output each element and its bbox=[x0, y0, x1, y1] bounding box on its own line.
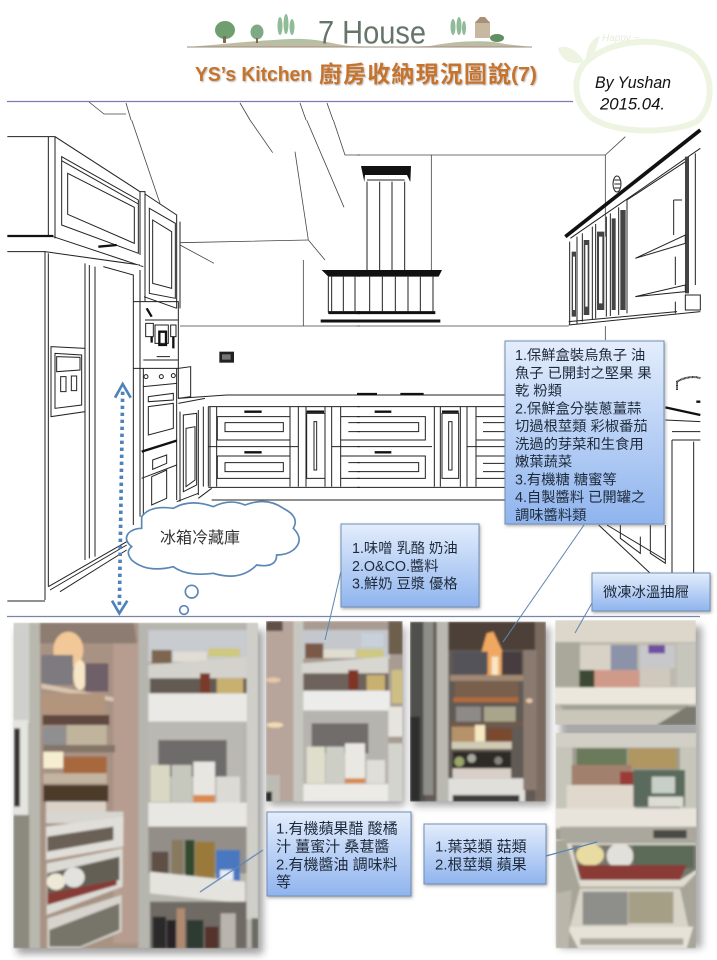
lower section rule bbox=[7, 616, 700, 618]
leader lines bbox=[200, 525, 597, 892]
tall narrow cabinet bbox=[133, 192, 180, 368]
photo: upper door bins bbox=[266, 621, 405, 806]
callout: fridge shelves: 3.有機糖 糖蜜等 bbox=[515, 470, 617, 488]
callout: fridge shelves: 4.自製醬料 已開罐之 bbox=[515, 489, 645, 506]
callout: door lower bins bbox=[267, 812, 411, 896]
callout: vegetable drawers: 2.根莖類 蘋果 bbox=[435, 856, 527, 874]
fridge bbox=[7, 252, 140, 601]
callout: vegetable drawers: 1.葉菜類 菇類 bbox=[435, 838, 527, 856]
wall and ceiling bbox=[357, 137, 625, 340]
cloud label: 冰箱冷藏庫 bbox=[160, 529, 240, 547]
upper wall cabinet bbox=[7, 137, 143, 267]
callout: door lower bins: 1.有機蘋果醋 酸橘 bbox=[276, 820, 398, 838]
callout: door upper bins: 3.鮮奶 豆漿 優格 bbox=[352, 576, 458, 592]
header rule bbox=[7, 100, 573, 102]
range hood left part bbox=[322, 270, 360, 277]
cloud callout: fridge compartment bbox=[126, 502, 299, 614]
photo: freezer lower drawers bbox=[556, 840, 696, 948]
author badge: green sprout ring bbox=[558, 33, 710, 131]
right half of drawing bbox=[357, 130, 700, 573]
logo: 7 House landscape bbox=[187, 14, 532, 50]
callout: chilled drawer bbox=[592, 573, 710, 611]
callout: fridge shelves bbox=[505, 341, 664, 524]
callout: fridge shelves: 洗過的芽菜和生食用 bbox=[515, 436, 644, 453]
title: YS’s Kitchen bbox=[195, 64, 312, 86]
wall clock bbox=[613, 176, 621, 192]
lower corner cabinet bbox=[177, 407, 212, 502]
callout: fridge shelves: 2.保鮮盒分裝蔥薑蒜 bbox=[515, 400, 641, 418]
upper right cabinets bbox=[565, 130, 700, 237]
callout: chilled drawer: 微凍冰溫抽屜 bbox=[603, 584, 689, 601]
callout: door lower bins: 2.有機醬油 調味料 bbox=[276, 856, 398, 874]
callout: fridge shelves: 乾 粉類 bbox=[515, 382, 562, 400]
photo: freezer top drawer bbox=[555, 620, 702, 948]
wall outlet bbox=[219, 352, 234, 363]
wall and soffit bbox=[180, 240, 360, 326]
author badge: green sprout ring: Happy ~ bbox=[602, 33, 640, 44]
callout: fridge shelves: 切過根莖類 彩椒番茄 bbox=[515, 418, 648, 435]
callout: door upper bins bbox=[341, 524, 479, 607]
left half of drawing bbox=[7, 120, 360, 601]
counter and base cabinets bbox=[178, 395, 360, 500]
callout: door upper bins: 2.O&CO.醬料 bbox=[352, 558, 439, 575]
title bbox=[195, 61, 537, 87]
callout: fridge shelves: 嫩葉蔬菜 bbox=[515, 454, 572, 470]
countertop and cooktop bbox=[357, 395, 505, 500]
photo: full fridge open bbox=[13, 623, 263, 954]
photo: freezer middle drawer bbox=[556, 733, 697, 840]
coffee machine and ovens bbox=[133, 320, 178, 517]
top ceiling fragments bbox=[89, 102, 333, 120]
author text: By Yushan bbox=[595, 73, 671, 92]
faucet bbox=[677, 377, 700, 390]
kitchen line drawing bbox=[7, 102, 700, 601]
author text: 2015.04. bbox=[599, 94, 665, 114]
photo: upper fridge shelves bbox=[410, 622, 550, 806]
fridge dispenser bbox=[51, 347, 85, 417]
range hood chimney and hood bbox=[361, 166, 411, 182]
callout: fridge shelves: 魚子 已開封之堅果 果 bbox=[515, 365, 652, 382]
dotted height arrow bbox=[112, 384, 131, 613]
callout: door lower bins: 等 bbox=[276, 873, 291, 891]
author text bbox=[595, 73, 671, 114]
ceiling lines bbox=[132, 120, 360, 260]
logo wordmark: 7 House bbox=[318, 14, 426, 50]
right counter and side cabinets bbox=[599, 420, 700, 573]
callout: fridge shelves: 調味醬料類 bbox=[515, 507, 586, 524]
title: (7) bbox=[511, 64, 537, 86]
callout: vegetable drawers bbox=[424, 824, 546, 884]
callout: fridge shelves: 1.保鮮盒裝烏魚子 油 bbox=[515, 347, 645, 364]
callout: door lower bins: 汁 薑蜜汁 桑葚醬 bbox=[276, 838, 389, 856]
callout: door upper bins: 1.味噌 乳酪 奶油 bbox=[352, 540, 458, 557]
title: 廚房收納現況圖說 bbox=[319, 61, 511, 87]
